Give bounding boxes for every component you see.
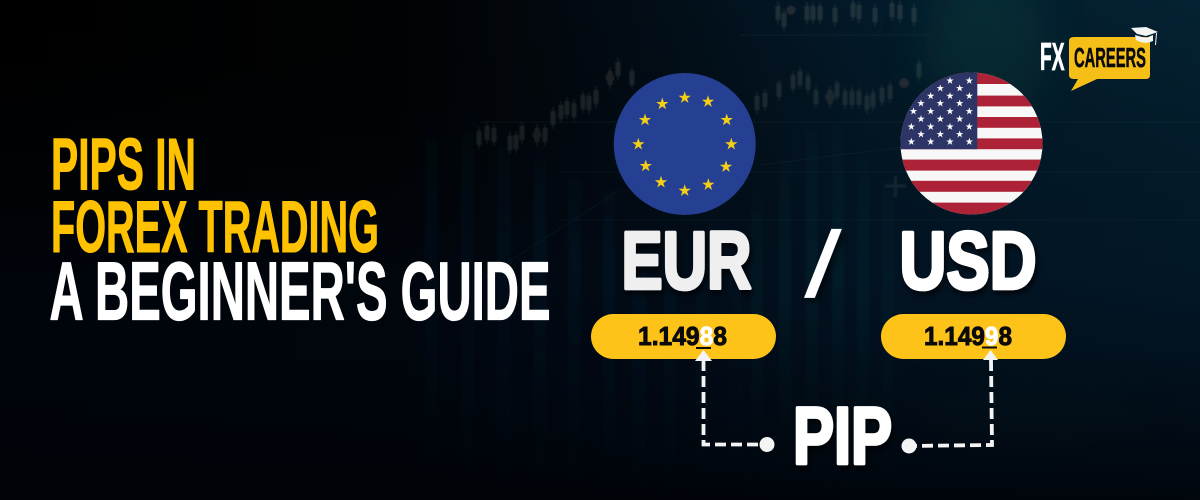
- title: heading text: PIPS IN: [51, 125, 196, 206]
- separator: slash: /: [804, 212, 842, 317]
- title: heading text: [50, 125, 550, 338]
- icon: EU flag: [614, 73, 756, 215]
- logo: FX Careers: [1040, 27, 1158, 91]
- arrow: PIP to USD digit: [902, 350, 998, 454]
- label: PIP: PIP: [793, 392, 892, 482]
- price pill: USD rate: 1.14998: [924, 323, 1012, 351]
- currency label: EUR: EUR: [622, 216, 752, 306]
- price pill: USD rate: [881, 314, 1066, 359]
- arrow: PIP to EUR digit: [695, 350, 774, 452]
- price pill: EUR rate: [591, 314, 776, 359]
- logo: FX Careers: FX: [1040, 36, 1064, 79]
- title: heading text: FOREX TRADING: [51, 187, 379, 268]
- price pill: EUR rate: 1.14988: [638, 323, 727, 351]
- icon: US flag: [900, 72, 1044, 216]
- title: heading text: A BEGINNER'S GUIDE: [50, 244, 550, 338]
- currency label: USD: USD: [900, 216, 1036, 306]
